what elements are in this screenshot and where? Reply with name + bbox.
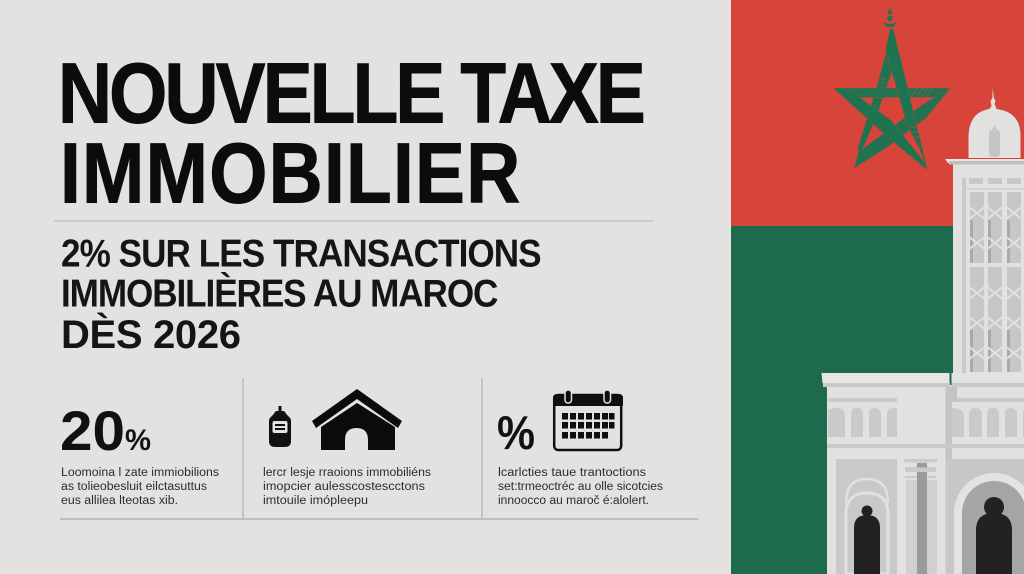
subtitle: IMMOBILIÈRES AU MAROC [61, 271, 498, 315]
subtitle: 2% SUR LES TRANSACTIONS [61, 231, 542, 275]
icon: pentagram star [833, 8, 951, 170]
description 2: imtouile imópleepu [263, 495, 368, 507]
stat column: house [263, 389, 431, 507]
star hatching [877, 78, 933, 138]
description 2: lercr lesje rraoions immobiliéns [263, 467, 431, 479]
panel: flag [731, 0, 1024, 574]
stat column: calendar [497, 390, 663, 507]
title: IMMOBILIER [60, 126, 520, 221]
large arch door [954, 473, 1024, 574]
title [58, 46, 646, 221]
icon: house [312, 389, 402, 450]
title: NOUVELLE TAXE [58, 46, 646, 141]
subtitle [61, 231, 542, 357]
minaret shaft [945, 159, 1024, 375]
subtitle: DÈS 2026 [61, 312, 241, 357]
mosque body [822, 373, 1024, 574]
icon: calendar [553, 390, 623, 450]
description 1: as tolieobesluit eilctasuttus [61, 481, 207, 493]
description 1: Loomoina l zate immiobilions [61, 467, 219, 479]
description 3: set:trmeoctréc au olle sicotcies [498, 481, 663, 493]
description 1: eus allilea lteotas xib. [61, 495, 178, 507]
illustration: mosque minaret [822, 88, 1024, 574]
stat percent sign: % [125, 424, 151, 457]
stat column: 20% [60, 399, 219, 507]
minaret dome [968, 88, 1021, 158]
description 3 [498, 467, 663, 507]
description 2: imopcier aulesscostescctons [263, 481, 425, 493]
small arch door [846, 479, 888, 574]
arcade windows [828, 408, 1024, 437]
icon: tag bottle [269, 406, 291, 447]
description 3: innoocco au maroč é:alolert. [498, 495, 649, 507]
description 3: lcarlcties taue trantoctions [498, 467, 646, 479]
description 1 [61, 467, 219, 507]
central column [904, 459, 937, 574]
percent icon: % [497, 406, 535, 459]
description 2 [263, 467, 431, 507]
stat value: 20 [60, 399, 125, 462]
